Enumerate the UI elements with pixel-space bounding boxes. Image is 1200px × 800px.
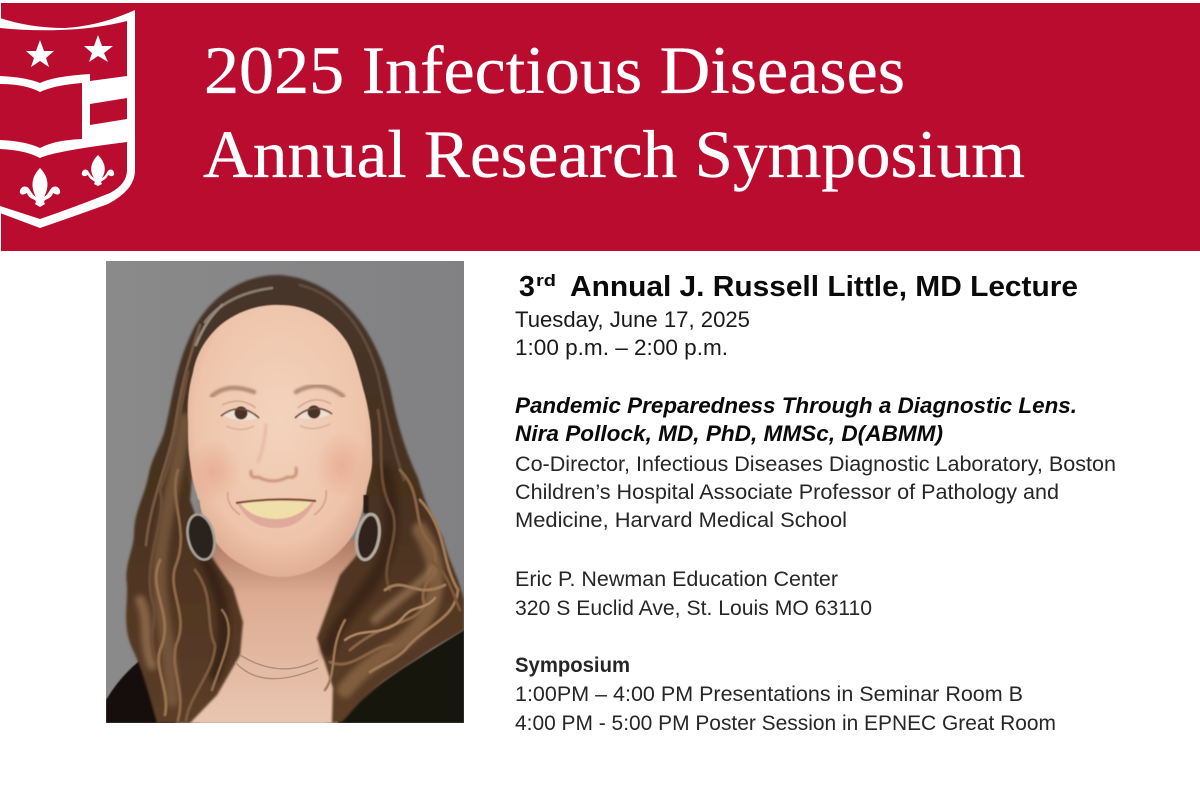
icon: university shield logo xyxy=(0,10,135,228)
speaker portrait photo xyxy=(106,261,464,723)
neck and chest xyxy=(175,540,365,723)
icon: left star xyxy=(26,40,54,67)
talk title and speaker name xyxy=(515,393,1077,446)
lecture heading: rd xyxy=(536,271,556,290)
talk title and speaker name: Nira Pollock, MD, PhD, MMSc, D(ABMM) xyxy=(515,421,943,446)
lecture heading: 3 xyxy=(519,271,535,303)
venue: Eric P. Newman Education Center xyxy=(515,568,838,591)
earrings xyxy=(184,495,383,562)
face xyxy=(185,305,372,577)
title xyxy=(203,32,1025,192)
symposium schedule: 1:00PM – 4:00 PM Presentations in Seminar Room B xyxy=(515,683,1023,706)
lecture heading: Annual J. Russell Little, MD Lecture xyxy=(570,271,1078,303)
speaker affiliation: Children’s Hospital Associate Professor of Pathology and xyxy=(515,481,1059,504)
speaker affiliation xyxy=(515,453,1116,532)
icon: right star xyxy=(84,35,113,62)
eyebrows xyxy=(212,386,343,396)
hair xyxy=(126,275,464,723)
title: 2025 Infectious Diseases xyxy=(204,32,905,108)
icon: left fleur-de-lis xyxy=(20,168,60,207)
symposium schedule: 4:00 PM - 5:00 PM Poster Session in EPNEC Great Room xyxy=(515,712,1056,735)
nose xyxy=(251,425,296,481)
date and time: Tuesday, June 17, 2025 xyxy=(515,307,750,332)
date and time xyxy=(515,307,750,360)
eyes xyxy=(221,400,332,430)
black top xyxy=(106,630,464,723)
title: Annual Research Symposium xyxy=(203,116,1025,192)
icon: right fleur-de-lis xyxy=(82,155,114,186)
date and time: 1:00 p.m. – 2:00 p.m. xyxy=(515,335,728,360)
venue: 320 S Euclid Ave, St. Louis MO 63110 xyxy=(515,597,872,620)
smile xyxy=(228,490,326,528)
speaker affiliation: Medicine, Harvard Medical School xyxy=(515,509,847,532)
hair shadows and highlights xyxy=(140,420,436,700)
venue xyxy=(515,568,872,620)
talk title and speaker name: Pandemic Preparedness Through a Diagnostic Lens. xyxy=(515,393,1077,418)
speaker affiliation: Co-Director, Infectious Diseases Diagnostic Laboratory, Boston xyxy=(515,453,1116,476)
symposium schedule xyxy=(515,654,1056,735)
necklaces xyxy=(235,655,318,679)
banner xyxy=(0,3,1200,251)
symposium schedule: Symposium xyxy=(515,654,630,677)
